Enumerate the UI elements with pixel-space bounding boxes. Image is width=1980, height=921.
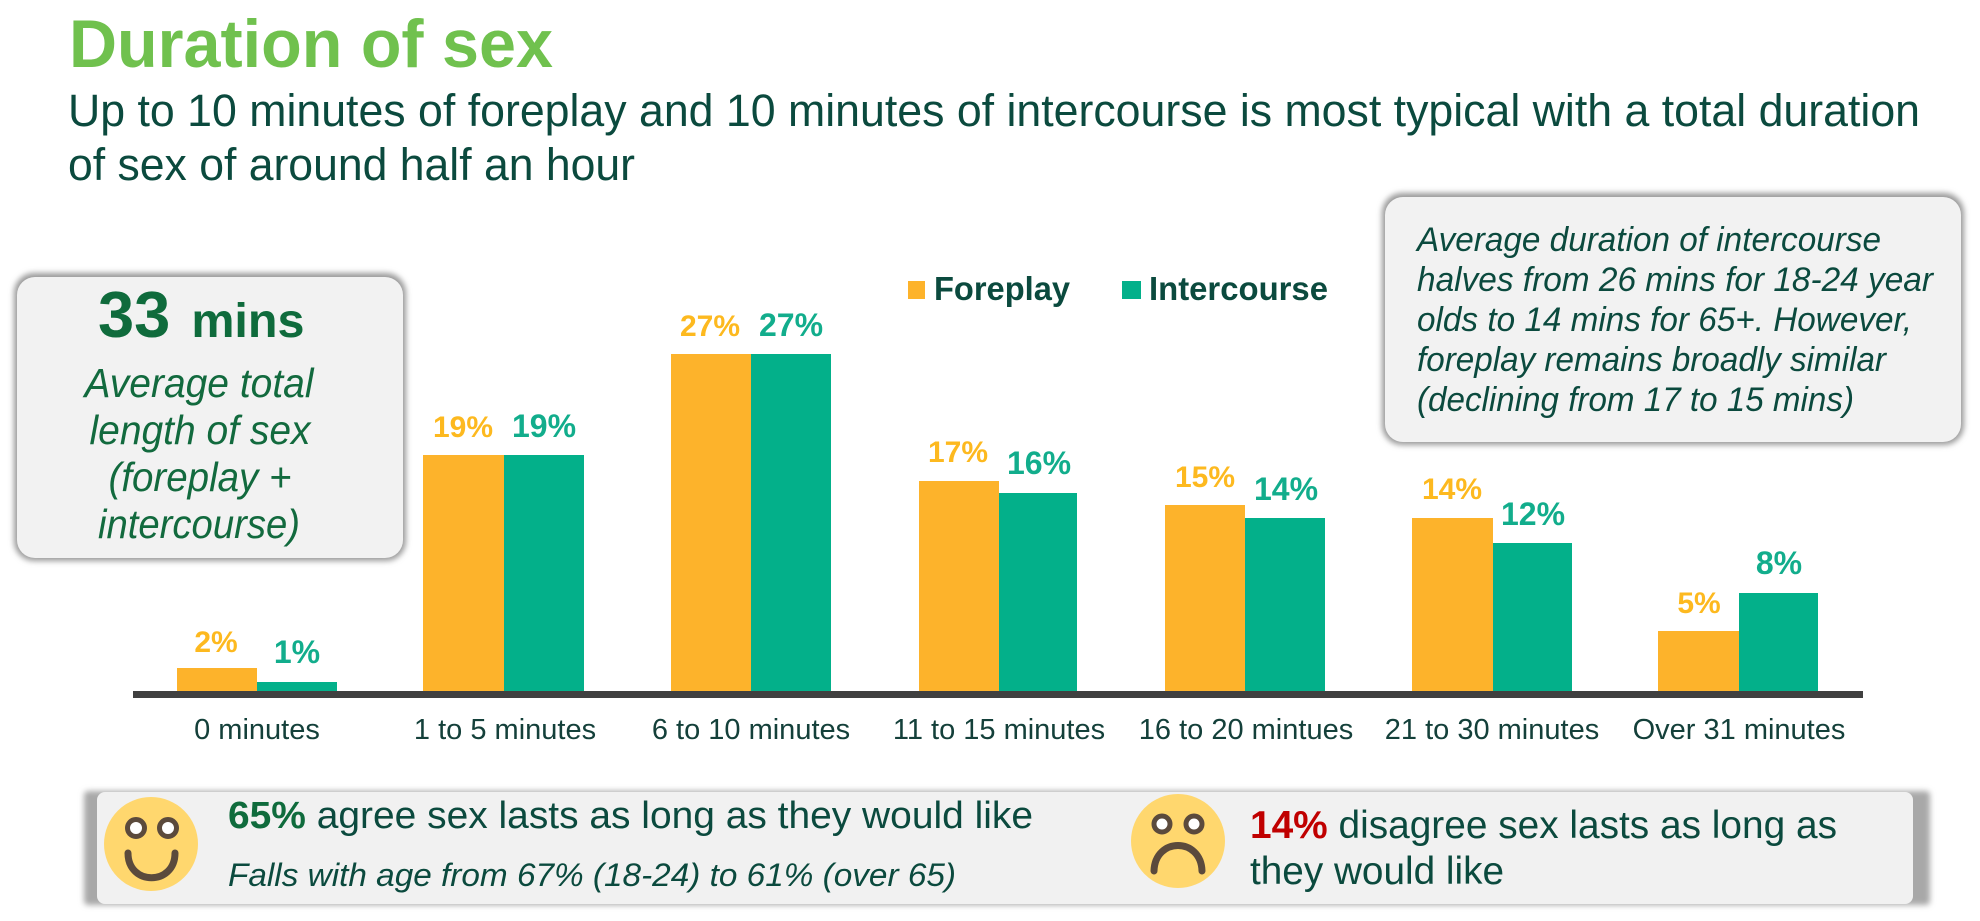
text: 14% disagree: they would like: [1250, 850, 1504, 893]
callout text: [1415, 221, 1934, 419]
group: 21 to 30 minutes: 21 to 30 minutes: [1385, 714, 1599, 746]
callout description: length of sex: [90, 407, 312, 453]
bar chart: [133, 307, 1863, 746]
group: 11 to 15 minutes: 17%: [928, 436, 988, 469]
panel: intercourse vs foreplay by age callout: [1382, 193, 1964, 445]
big number: 33 mins: 33 mins: [98, 278, 305, 351]
group: 0 minutes: 1%: [274, 634, 320, 670]
group: 11 to 15 minutes: 11 to 15 minutes: [893, 714, 1105, 746]
text: 14% disagree: 14% disagree sex lasts as long as: [1250, 804, 1837, 847]
subtitle: of sex of around half an hour: [68, 139, 635, 190]
panel: average total length callout: [14, 273, 406, 561]
group: 6 to 10 minutes: 27%: [680, 310, 740, 343]
group: 0 minutes: 0 minutes: [194, 714, 320, 746]
callout text: olds to 14 mins for 65+. However,: [1417, 301, 1912, 339]
group: 6 to 10 minutes: 6 to 10 minutes: [652, 714, 850, 746]
group: 16 to 20 mintues: 14%: [1254, 471, 1318, 507]
group: over 31 minutes: Over 31 minutes: [1633, 714, 1845, 746]
group: 11 to 15 minutes: 16%: [1007, 445, 1071, 481]
callout description: [83, 360, 314, 547]
group: 1 to 5 minutes: [414, 408, 596, 746]
icon: smiling face: [104, 797, 198, 891]
group: 0 minutes: 2%: [194, 626, 238, 659]
callout text: Average duration of intercourse: [1415, 221, 1881, 259]
panel: agreement strip: [84, 791, 1930, 905]
subtitle: [68, 85, 1920, 190]
group: 0 minutes: [177, 626, 337, 746]
text: falls with age: Falls with age from 67% (18-24) to 61% (over 65): [228, 857, 956, 893]
legend: Intercourse: [1149, 270, 1328, 307]
group: over 31 minutes: [1633, 545, 1845, 746]
group: 16 to 20 mintues: 16 to 20 mintues: [1139, 714, 1353, 746]
group: 6 to 10 minutes: [652, 307, 850, 746]
group: 6 to 10 minutes: 27%: [759, 307, 823, 343]
subtitle: Up to 10 minutes of foreplay and 10 minutes of intercourse is most typical with a total duration: [68, 85, 1920, 136]
group: 21 to 30 minutes: 12%: [1501, 496, 1565, 532]
callout text: (declining from 17 to 15 mins): [1417, 381, 1854, 419]
icon: sad face: [1131, 794, 1225, 888]
group: 16 to 20 mintues: [1139, 461, 1353, 746]
callout description: Average total: [83, 360, 314, 406]
group: 11 to 15 minutes: [893, 436, 1105, 746]
callout text: foreplay remains broadly similar: [1417, 341, 1887, 379]
callout text: halves from 26 mins for 18-24 year: [1417, 261, 1934, 299]
callout description: (foreplay +: [108, 454, 292, 500]
group: 1 to 5 minutes: 19%: [512, 408, 576, 444]
text: 14% disagree: [1250, 804, 1837, 893]
group: 1 to 5 minutes: 1 to 5 minutes: [414, 714, 596, 746]
group: 21 to 30 minutes: 14%: [1422, 473, 1482, 506]
legend: Foreplay: [934, 270, 1071, 307]
group: 1 to 5 minutes: 19%: [433, 411, 493, 444]
group: 16 to 20 mintues: 15%: [1175, 461, 1235, 494]
legend: [908, 270, 1328, 307]
title: Duration of sex: [69, 6, 553, 82]
callout description: intercourse): [98, 501, 300, 547]
group: over 31 minutes: 5%: [1677, 587, 1721, 620]
group: 21 to 30 minutes: [1385, 473, 1599, 746]
text: 65% agree: 65% agree sex lasts as long as they would like: [228, 795, 1033, 837]
group: over 31 minutes: 8%: [1756, 545, 1802, 581]
